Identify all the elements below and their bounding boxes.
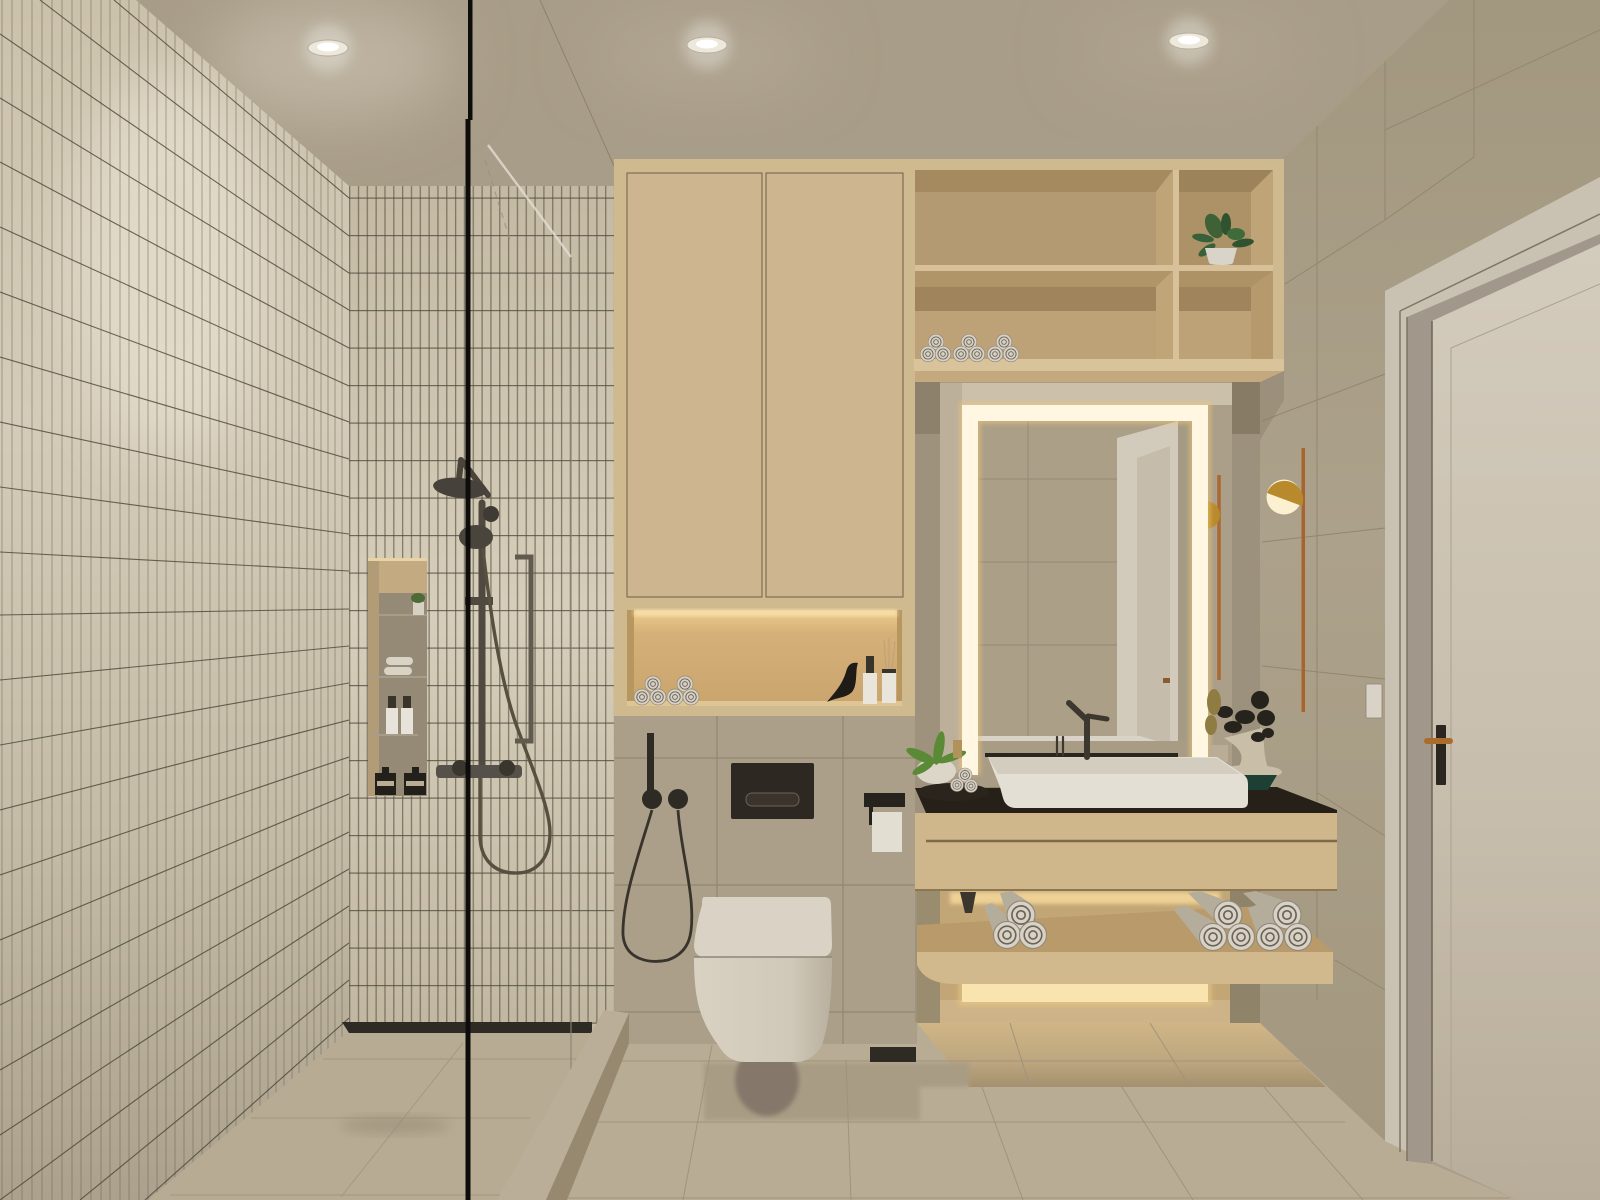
lit floor under vanity bbox=[917, 1023, 1326, 1087]
rolled towels in niche bbox=[384, 657, 413, 675]
niche white bottles bbox=[386, 696, 413, 734]
small plant in niche bbox=[411, 593, 425, 615]
hand shower bbox=[459, 525, 493, 549]
left side shadow bbox=[704, 1063, 969, 1120]
niche dark bottles bbox=[375, 767, 426, 795]
rain shower set bbox=[432, 460, 550, 873]
soap bottle bbox=[863, 656, 877, 704]
riser pipe bbox=[478, 503, 486, 770]
floor bbox=[567, 1023, 1517, 1200]
small vase under vanity bbox=[960, 892, 976, 913]
shelf plant bbox=[1191, 211, 1255, 265]
flush plate bbox=[731, 763, 814, 819]
tall cabinet bbox=[614, 159, 915, 716]
glass door profile bbox=[466, 0, 472, 1200]
illuminated mirror frame bbox=[970, 413, 1200, 775]
niche towels bbox=[634, 676, 699, 705]
door handle bbox=[1424, 725, 1453, 785]
reflected door bbox=[1117, 421, 1178, 741]
upper open shelving bbox=[914, 159, 1284, 382]
faucet bbox=[1057, 703, 1107, 757]
under vanity glow bbox=[917, 890, 1260, 1023]
door frame bbox=[1385, 177, 1600, 1164]
right towels bbox=[1174, 891, 1312, 950]
glass panel reflection bbox=[485, 145, 571, 1090]
mirror reflection bbox=[978, 421, 1178, 741]
right wall bbox=[1250, 0, 1600, 1200]
lower towel shelf bbox=[917, 891, 1333, 984]
cabinet door right bbox=[766, 173, 903, 597]
reflected sink bbox=[978, 736, 1156, 741]
recess around mirror bbox=[915, 382, 1260, 1022]
floor drain channel bbox=[342, 1022, 592, 1033]
shelf towels bbox=[920, 334, 1019, 362]
light switch bbox=[1366, 684, 1382, 718]
reflected sconce in mirror side bbox=[1192, 475, 1220, 680]
bonsai bbox=[1217, 691, 1282, 790]
shower curb bbox=[497, 1010, 629, 1200]
toilet floor shadow bbox=[735, 1044, 799, 1116]
vanity cabinet front bbox=[915, 813, 1337, 891]
counter plant with tray bbox=[904, 730, 989, 801]
wash basin bbox=[985, 755, 1248, 808]
left towels bbox=[984, 891, 1046, 948]
shower niche with toiletries bbox=[368, 558, 427, 796]
bidet sprayer bbox=[623, 733, 692, 961]
grab bar bbox=[515, 557, 531, 741]
shower back wall tiles bbox=[349, 186, 614, 1036]
lit niche bbox=[627, 610, 902, 706]
countertop bbox=[915, 787, 1337, 813]
door leaf bbox=[1432, 244, 1600, 1200]
vanity bbox=[904, 689, 1337, 891]
thermostatic mixer bbox=[436, 760, 522, 778]
back wall tile under the cabinet bbox=[615, 716, 916, 1044]
floor grate bbox=[870, 1047, 916, 1062]
shower head bbox=[432, 460, 499, 522]
reed diffuser bbox=[882, 638, 896, 703]
ceiling lights bbox=[304, 17, 1213, 72]
shower floor bbox=[148, 1031, 610, 1200]
toilet bbox=[694, 897, 832, 1062]
ceiling bbox=[0, 0, 1600, 200]
slider bracket bbox=[465, 597, 493, 605]
hose bbox=[480, 550, 550, 873]
reflected bonsai bbox=[1205, 689, 1228, 762]
wall sconce bbox=[1266, 448, 1305, 712]
shower left wall tiles bbox=[0, 0, 349, 1200]
cabinet door left bbox=[627, 173, 762, 597]
reflected wall sliver bbox=[1182, 655, 1190, 675]
decorative bird bbox=[827, 663, 858, 702]
toilet paper holder bbox=[864, 793, 905, 852]
